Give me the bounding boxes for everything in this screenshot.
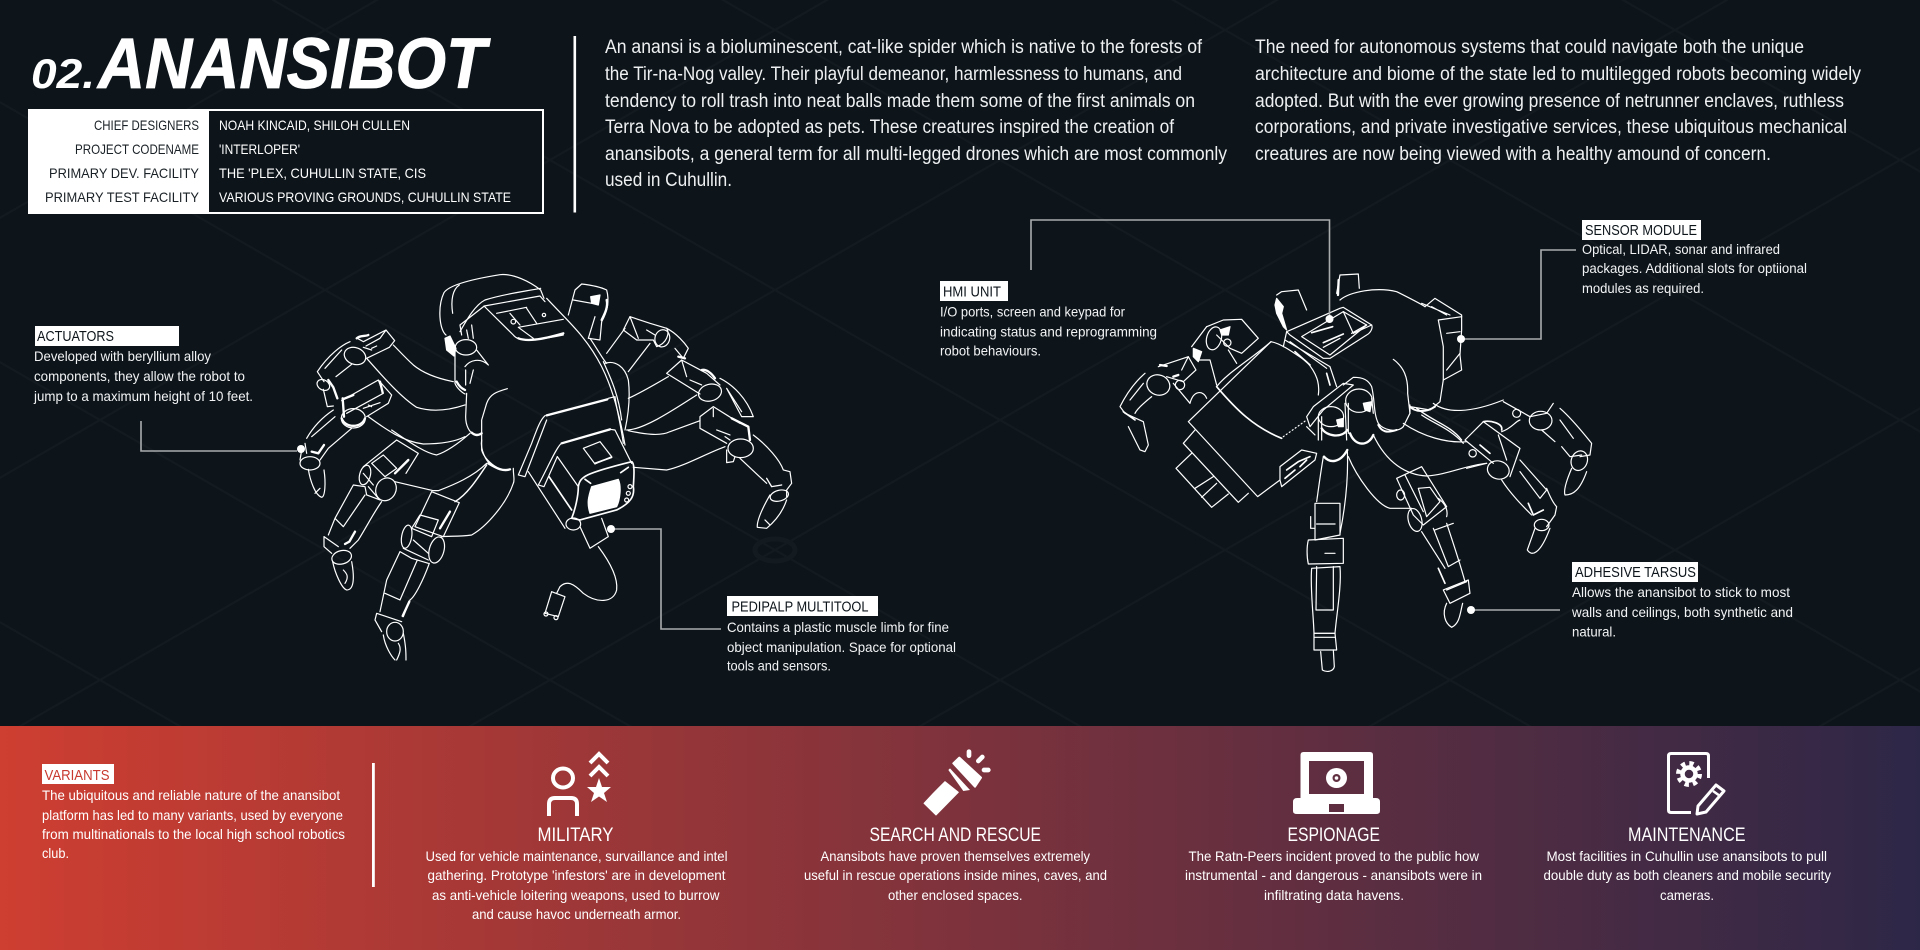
variant: search and rescue: SEARCH AND RESCUE <box>870 825 1041 846</box>
variant: maintenance <box>1544 754 1831 903</box>
callout: actuators: ACTUATORS <box>37 329 114 345</box>
title: 02. <box>31 50 95 97</box>
title: ANANSIBOT <box>96 25 491 104</box>
callout: sensor module: modules as required. <box>1582 280 1704 296</box>
variants introduction: platform has led to many variants, used by everyone <box>42 807 343 823</box>
callout: sensor module <box>1457 220 1807 343</box>
intro paragraph left: Terra Nova to be adopted as pets. These creatures inspired the creation of <box>605 117 1175 138</box>
variant: military <box>426 754 728 922</box>
intro paragraph right: adopted. But with the ever growing presence of netrunner enclaves, ruthless <box>1255 91 1844 112</box>
icon: laptop with eye <box>1293 752 1380 814</box>
specification table: THE 'PLEX, CUHULLIN STATE, CIS <box>219 165 426 181</box>
panel: variants band <box>0 726 1920 950</box>
callout: sensor module: Optical, LIDAR, sonar and infrared <box>1582 241 1780 257</box>
illustration: anansibot rear view <box>1120 274 1592 671</box>
variant: maintenance: double duty as both cleaners and mobile security <box>1544 867 1831 883</box>
callout: HMI unit <box>940 220 1334 358</box>
callout: actuators: components, they allow the robot to <box>34 368 245 384</box>
callout: adhesive tarsus <box>1467 562 1793 640</box>
shell, rear pack and upper legs <box>1120 274 1462 507</box>
specification table: NOAH KINCAID, SHILOH CULLEN <box>219 117 410 133</box>
body, front tool and right legs <box>518 284 792 548</box>
specification table: 'INTERLOPER' <box>219 141 300 157</box>
callout: sensor module: SENSOR MODULE <box>1585 223 1697 239</box>
illustration: anansibot front view <box>300 275 792 660</box>
intro paragraph left: anansibots, a general term for all multi-legged drones which are most commonly <box>605 144 1227 165</box>
callout: adhesive tarsus: Allows the anansibot to stick to most <box>1572 584 1790 600</box>
variant: espionage <box>1185 752 1482 903</box>
callout: actuators: Developed with beryllium alloy <box>34 348 211 364</box>
intro paragraph left: tendency to roll trash into neat balls made them some of the first animals on <box>605 91 1195 112</box>
variants introduction: VARIANTS <box>44 768 110 784</box>
intro paragraph right: architecture and biome of the state led to multilegged robots becoming widely <box>1255 64 1861 85</box>
variant: military: Used for vehicle maintenance, survaillance and intel <box>426 848 728 864</box>
head shell and rear legs <box>307 275 563 467</box>
intro paragraph left: used in Cuhullin. <box>605 170 732 191</box>
callout: actuators <box>33 326 305 453</box>
variant: maintenance: Most facilities in Cuhullin use anansibots to pull <box>1546 848 1827 864</box>
variant: espionage: The Ratn-Peers incident proved to the public how <box>1188 848 1480 864</box>
callout: adhesive tarsus: ADHESIVE TARSUS <box>1575 565 1696 581</box>
callout: pedipalp multitool: PEDIPALP MULTITOOL <box>732 600 868 616</box>
variant: maintenance: cameras. <box>1660 887 1714 903</box>
variant: espionage: instrumental - and dangerous - anansibots were in <box>1185 867 1482 883</box>
intro paragraph right: creatures are now being viewed with a healthy amound of concern. <box>1255 144 1771 165</box>
callout: sensor module: packages. Additional slots for optiional <box>1582 260 1807 276</box>
specification table: PRIMARY TEST FACILITY <box>45 189 200 205</box>
variants introduction: from multinationals to the local high school robotics <box>42 826 345 842</box>
callout: adhesive tarsus: walls and ceilings, both synthetic and <box>1571 604 1793 620</box>
callout: actuators: jump to a maximum height of 10 feet. <box>33 388 253 404</box>
variant: military: gathering. Prototype 'infestors' are in development <box>428 867 726 883</box>
icon: flashlight <box>924 752 988 815</box>
variants introduction: The ubiquitous and reliable nature of the anansibot <box>42 787 340 803</box>
variant: search and rescue <box>804 752 1107 903</box>
specification table <box>28 109 543 214</box>
intro paragraph left <box>605 37 1227 191</box>
variants introduction: club. <box>42 845 69 861</box>
variants introduction <box>42 764 345 861</box>
callout: HMI unit: robot behaviours. <box>940 342 1041 358</box>
variant: search and rescue: other enclosed spaces. <box>888 887 1022 903</box>
callout: pedipalp multitool <box>607 525 956 674</box>
callout: pedipalp multitool: Contains a plastic muscle limb for fine <box>727 619 949 635</box>
variant: military: as anti-vehicle loitering weapons, used to burrow <box>432 887 720 903</box>
intro paragraph left: the Tir-na-Nog valley. Their playful demeanor, harmlessness to humans, and <box>605 64 1182 85</box>
lower left legs and tool cable <box>300 440 617 660</box>
icon: tablet with gear and pencil <box>1668 754 1724 814</box>
variant: maintenance: MAINTENANCE <box>1628 825 1746 846</box>
specification table: CHIEF DESIGNERS <box>94 117 199 133</box>
callout: pedipalp multitool: object manipulation. Space for optional <box>727 639 956 655</box>
callout: pedipalp multitool: tools and sensors. <box>727 658 831 674</box>
variant: search and rescue: useful in rescue operations inside mines, caves, and <box>804 867 1107 883</box>
icon: soldier with rank <box>549 754 611 816</box>
intro paragraph left: An anansi is a bioluminescent, cat-like spider which is native to the forests of <box>605 37 1203 58</box>
intro paragraph right: corporations, and private investigative services, these ubiquitous mechanical <box>1255 117 1847 138</box>
variant: espionage: infiltrating data havens. <box>1264 887 1404 903</box>
intro paragraph right: The need for autonomous systems that could navigate both the unique <box>1255 37 1804 58</box>
front legs and right legs <box>1307 400 1592 671</box>
variant: search and rescue: Anansibots have proven themselves extremely <box>820 848 1090 864</box>
specification table: VARIOUS PROVING GROUNDS, CUHULLIN STATE <box>219 189 511 205</box>
callout: HMI unit: HMI UNIT <box>943 284 1001 300</box>
intro paragraph right <box>1255 37 1861 165</box>
callout: HMI unit: I/O ports, screen and keypad for <box>940 304 1125 320</box>
callout: HMI unit: indicating status and reprogramming <box>940 324 1157 340</box>
variant: espionage: ESPIONAGE <box>1288 825 1380 846</box>
variant: military: MILITARY <box>538 825 614 846</box>
specification table: PROJECT CODENAME <box>75 141 199 157</box>
callout: adhesive tarsus: natural. <box>1572 624 1616 640</box>
variant: military: and cause havoc underneath armor. <box>472 906 681 922</box>
specification table: PRIMARY DEV. FACILITY <box>49 165 200 181</box>
